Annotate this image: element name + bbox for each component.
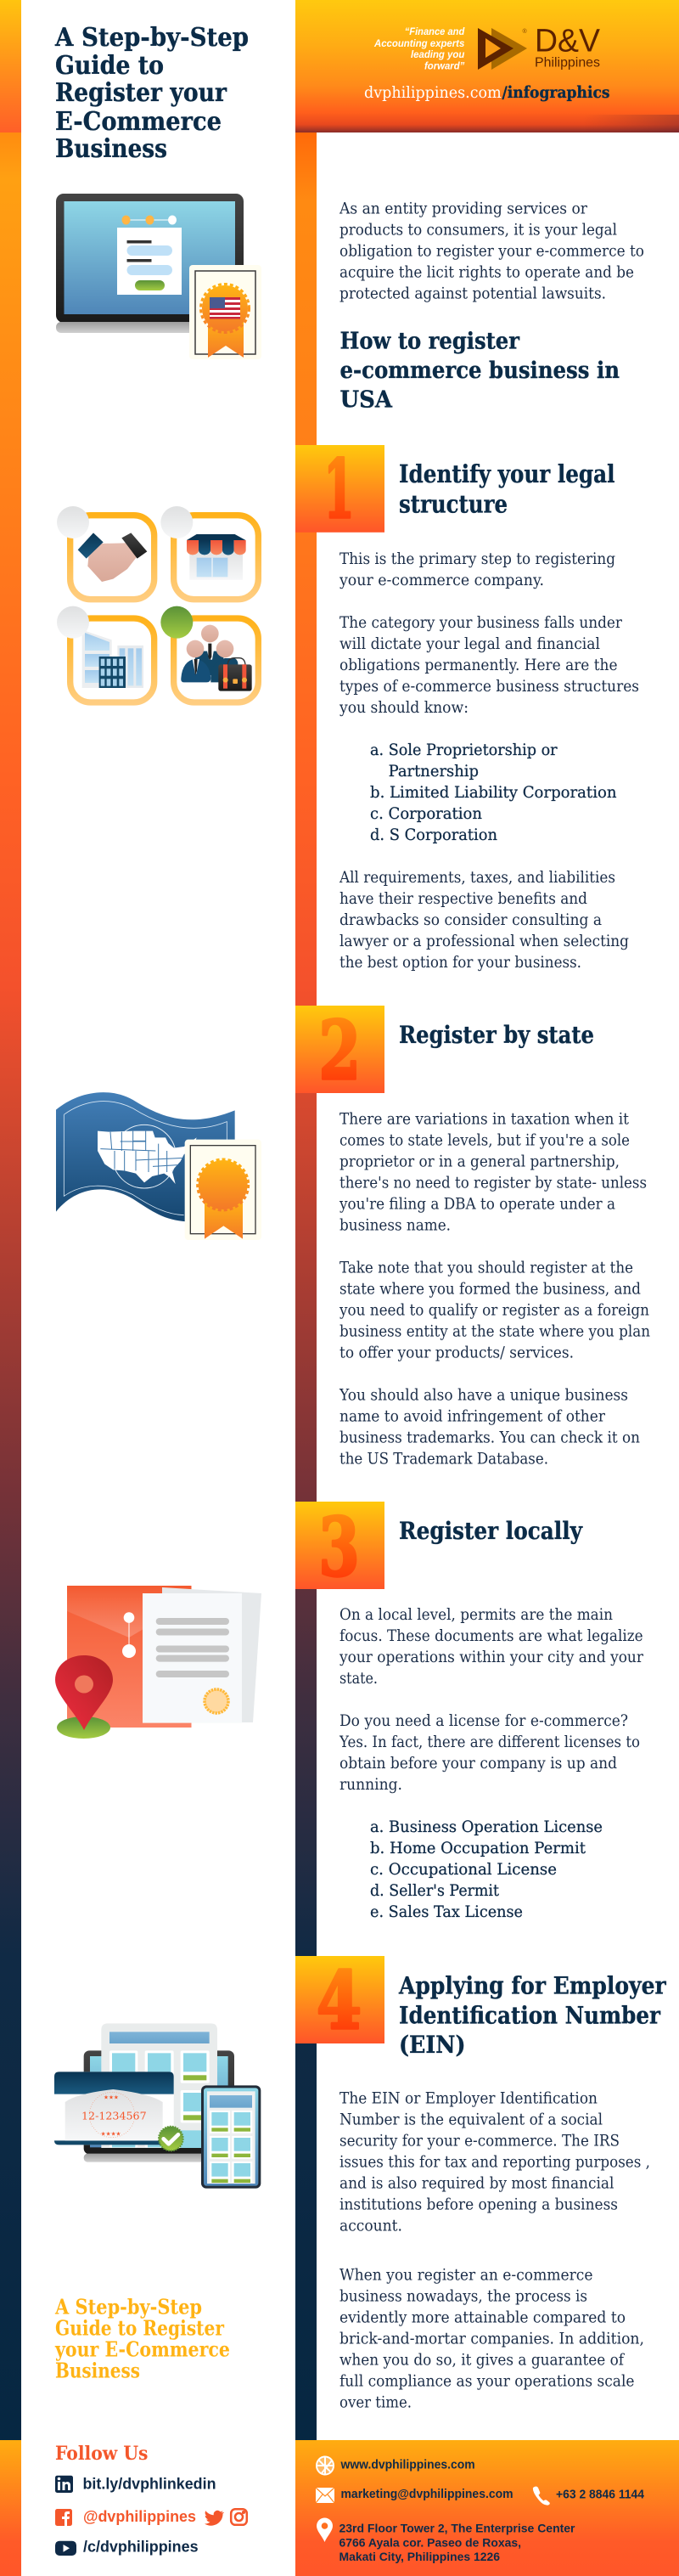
intro paragraph: products to consumers, it is your legal [340,222,617,240]
step 2 paragraph 3: name to avoid infringement of other [340,1407,605,1425]
title [54,23,249,164]
intro paragraph: protected against potential lawsuits. [340,285,606,303]
step 1 list of business structures: a. Sole Proprietorship or [370,741,558,759]
tagline [373,27,465,72]
icon: storefront [160,506,258,600]
left gradient strip [0,0,21,2576]
intro paragraph: acquire the licit rights to operate and be [340,264,634,282]
front document [143,1593,242,1723]
logo: D&V [535,24,601,59]
icon: US map flag with certificate [56,1092,261,1240]
address: 6766 Ayala cor. Paseo de Roxas, [340,2536,521,2549]
step 1 paragraph 1 [339,550,615,589]
step 3 number box [295,1500,384,1595]
step 4 paragraph 1: institutions before opening a business [340,2196,618,2213]
step 3 paragraph 2: Yes. In fact, there are different licenses to [339,1733,640,1751]
icon: location pin [317,2517,333,2542]
map pin [55,1655,113,1739]
step 2 paragraph 1: comes to state levels, but if you're a sole [340,1131,630,1149]
intro paragraph [339,200,644,303]
icon set: business structures [57,506,258,702]
step 4 paragraph 2: over time. [340,2393,412,2411]
step 2 paragraph 2 [339,1259,650,1361]
tablet page [101,2023,217,2148]
closing title [54,2295,230,2383]
EIN card: ★★★★ [101,2130,121,2137]
folder [67,1586,192,1728]
step 4 body text [340,2089,650,2411]
check badge [159,2127,183,2150]
closing title: Business [55,2358,140,2383]
youtube handle: /c/dvphilippines [83,2539,199,2556]
step 4 paragraph 1: Number is the equivalent of a social [340,2111,603,2128]
icon: EIN card and devices [54,2023,261,2189]
step 3 paragraph 1: your operations within your city and your [339,1649,643,1666]
website: www.dvphilippines.com [340,2459,475,2472]
logo: Philippines [535,55,600,70]
step 4 paragraph 2 [340,2266,644,2411]
intro paragraph: As an entity providing services or [339,200,587,218]
step 4 paragraph 2: When you register an e-commerce [340,2266,593,2284]
title: Business [55,134,167,164]
step 1 list of business structures: d. S Corporation [370,826,497,844]
step 2 paragraph 1: proprietor or in a general partnership, [340,1153,620,1170]
step 2 paragraph 3: business trademarks. You can check it on [340,1429,640,1446]
center gradient strip [295,132,317,2440]
step 2 paragraph 1: business name. [340,1216,451,1234]
icon: youtube [55,2541,76,2556]
step 4 paragraph 1: security for your e-commerce. The IRS [340,2132,620,2150]
icon: facebook [55,2509,72,2526]
step 1 list of business structures: Partnership [389,763,479,781]
icon: twitter [205,2511,224,2526]
step 2 paragraph 3 [339,1386,640,1468]
icon: instagram [231,2509,247,2525]
step 1 paragraph 2: will dictate your legal and financial [340,635,600,653]
heading: how to register [340,329,620,413]
address: Makati City, Philippines 1226 [340,2551,501,2563]
step 4 paragraph 2: business nowadays, the process is [340,2287,587,2305]
step 4 paragraph 1: issues this for tax and reporting purposes , [340,2153,650,2171]
step 1 list of business structures: c. Corporation [370,805,482,823]
step 1 paragraph 3: All requirements, taxes, and liabilities [339,869,615,887]
step 3 paragraph 1: state. [340,1670,378,1688]
step 4 paragraph 2: evidently more attainable compared to [340,2308,626,2326]
step 4 paragraph 1 [340,2089,650,2235]
laptop [84,2050,234,2162]
step 2 body text [339,1110,650,1468]
step 1 number box [295,442,384,537]
step 4 paragraph 2: full compliance as your operations scale [340,2372,635,2390]
step 1 heading: Identify your legal [399,459,615,488]
icon: folder, documents and map pin [55,1586,261,1739]
title: A Step-by-Step [54,23,249,53]
phone number: +63 2 8846 1144 [556,2489,644,2502]
step 1 number box: 1 [324,442,355,537]
EIN card: ★★★ [104,2094,119,2101]
follow us panel [55,2443,247,2556]
EIN card [54,2072,174,2145]
step 1 paragraph 1: your e-commerce company. [339,572,544,589]
step 1 heading [399,459,615,519]
step 2 paragraph 1: There are variations in taxation when it [340,1110,630,1128]
step 1 paragraph 3: the best option for your business. [340,954,581,972]
social handle: @dvphilippines [83,2508,196,2525]
step 1 paragraph 3: lawyer or a professional when selecting [340,933,629,950]
step 1 heading: structure [399,490,508,519]
step 1 body text [339,550,639,972]
icon: office buildings [57,606,154,702]
step 4 paragraph 2: brick-and-mortar companies. In addition, [340,2330,644,2348]
logo: ® [523,28,528,35]
tagline: Accounting experts [373,39,464,49]
step 3 list of licenses: e. Sales Tax License [370,1903,523,1921]
step 1 list of business structures [370,741,617,844]
step 2 number box [295,1004,384,1098]
email: marketing@dvphilippines.com [341,2488,513,2501]
step 1 paragraph 2 [339,614,639,717]
step 3 number box: 3 [319,1500,360,1595]
step 2 paragraph 2: you need to qualify or register as a foreign [339,1301,649,1319]
title: Guide to [55,51,164,81]
heading: how to register: How to register [340,329,520,355]
address [340,2522,575,2563]
step 2 paragraph 2: to offer your products/ services. [340,1344,574,1361]
step 3 paragraph 1 [339,1606,643,1688]
step 1 list of business structures: b. Limited Liability Corporation [370,784,617,802]
step 2 paragraph 1: you're filing a DBA to operate under a [339,1195,615,1213]
step 3 paragraph 1: On a local level, permits are the main [340,1606,613,1624]
step 2 paragraph 2: business entity at the state where you plan [340,1322,650,1340]
website link: dvphilippines.com [364,83,502,102]
icon: mail [316,2488,334,2503]
follow us heading: Follow Us [55,2443,148,2465]
closing title: your E-Commerce [54,2337,230,2361]
phone [201,2085,261,2189]
step 3 paragraph 1: focus. These documents are what legalize [340,1627,643,1645]
US map [98,1131,197,1184]
step 3 paragraph 2 [339,1712,640,1794]
step 3 list of licenses [370,1818,603,1921]
address: 23rd Floor Tower 2, The Enterprise Center [340,2522,575,2535]
step 2 number box: 2 [319,1004,361,1098]
step 4 number box: 4 [317,1954,362,2047]
step 2 paragraph 2: Take note that you should register at the [340,1259,633,1277]
step 2 paragraph 3: You should also have a unique business [339,1386,628,1404]
linkedin handle: bit.ly/dvphlinkedin [83,2475,216,2492]
website link [364,83,609,102]
step 2 heading: Register by state [399,1021,594,1049]
step 3 body text [339,1606,643,1921]
step 2 paragraph 2: state where you formed the business, and [340,1280,641,1298]
step 1 paragraph 3 [339,869,629,972]
icon: globe [317,2456,334,2475]
step 4 paragraph 1: The EIN or Employer Identification [340,2089,598,2107]
step 2 paragraph 1: there's no need to register by state- unless [340,1174,647,1192]
step 2 paragraph 3: the US Trademark Database. [340,1450,548,1468]
step 3 list of licenses: c. Occupational License [370,1861,557,1879]
heading: how to register: e-commerce business in [340,358,620,384]
certificate with ribbon [185,1140,261,1240]
icon: phone [533,2487,550,2506]
icon: linkedin [55,2476,73,2493]
step 3 paragraph 2: obtain before your company is up and [340,1755,617,1773]
folder clasp [122,1612,136,1658]
step 1 paragraph 2: The category your business falls under [340,614,622,632]
logo [478,24,601,70]
intro paragraph: obligation to register your e-commerce to [340,243,644,261]
website link: /infographics [502,83,609,102]
EIN card: 12-1234567 [81,2110,147,2122]
step 3 list of licenses: a. Business Operation License [370,1818,603,1836]
step 1 paragraph 2: types of e-commerce business structures [340,678,639,696]
step 1 paragraph 2: obligations permanently. Here are the [340,657,618,674]
closing title: Guide to Register [55,2315,225,2341]
step 1 paragraph 3: drawbacks so consider consulting a [340,911,602,929]
step 1 paragraph 3: have their respective benefits and [340,890,587,908]
step 3 paragraph 2: Do you need a license for e-commerce? [340,1712,628,1730]
step 4 heading: (EIN) [399,2031,465,2059]
step 3 paragraph 2: running. [340,1776,402,1794]
step 4 paragraph 1: account. [340,2217,402,2235]
back paper [162,1587,261,1722]
step 1 paragraph 1: This is the primary step to registering [340,550,615,568]
step 1 paragraph 2: you should know: [339,699,469,717]
step 2 paragraph 1 [339,1110,647,1234]
step 4 paragraph 1: and is also required by most financial [340,2174,614,2192]
tagline: leading you [411,50,464,60]
tagline: forward” [424,62,465,72]
icon: laptop with registration form and US certificate [56,194,261,359]
closing title: A Step-by-Step [54,2295,202,2319]
step 4 number box [295,1954,384,2047]
title: Register your [55,78,227,108]
title: E-Commerce [55,107,222,137]
step 4 paragraph 2: when you do so, it gives a guarantee of [340,2351,625,2369]
header banner [295,0,679,132]
step 3 list of licenses: b. Home Occupation Permit [370,1840,586,1857]
heading: how to register: USA [340,386,393,413]
flag [56,1092,235,1221]
tagline: “Finance and [405,27,465,37]
step 4 heading [398,1972,667,2059]
icon: business people with briefcase [160,606,258,702]
contact footer panel [295,2440,679,2576]
icon: handshake [57,506,154,600]
step 3 list of licenses: d. Seller's Permit [370,1882,500,1900]
step 3 heading: Register locally [399,1517,583,1545]
